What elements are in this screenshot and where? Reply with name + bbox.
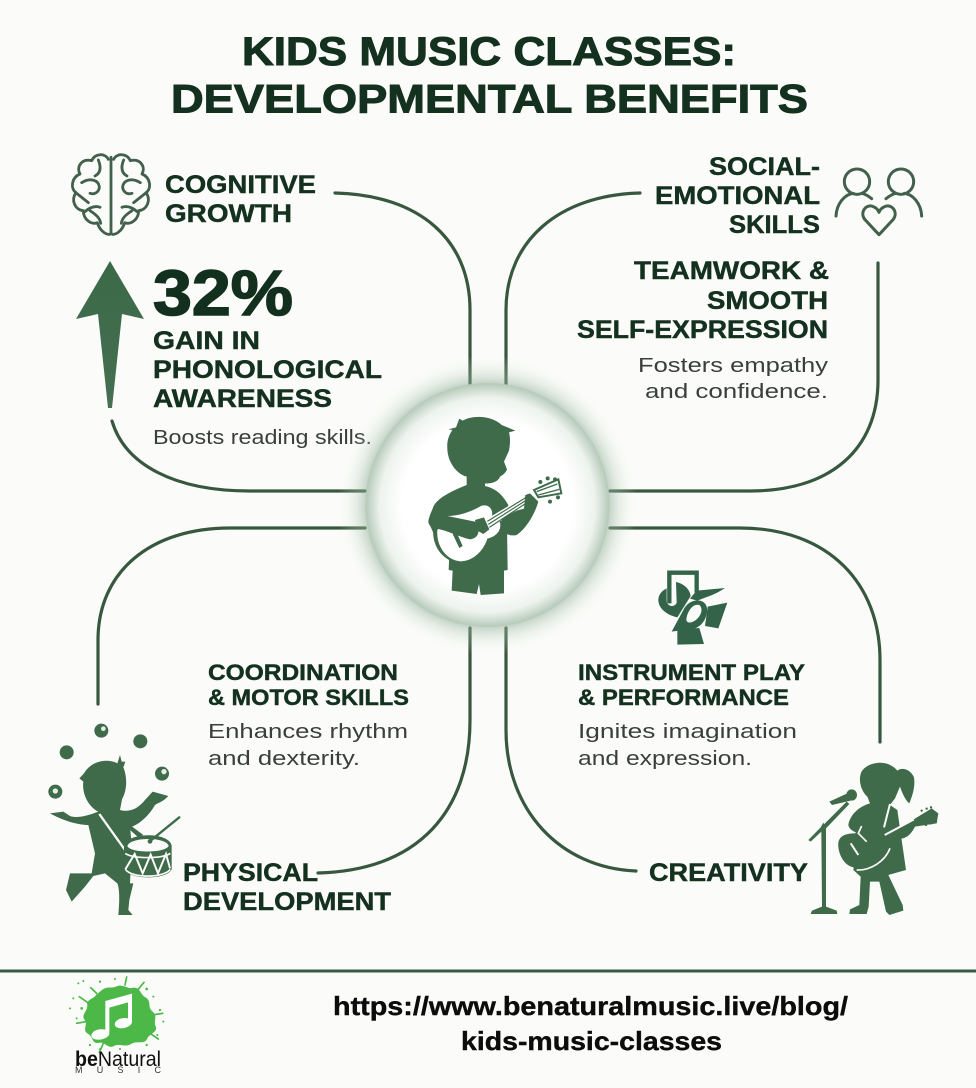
icon: two people and heart <box>836 169 922 235</box>
footer divider <box>0 970 976 972</box>
subheading: teamwork and self-expression: TEAMWORK & <box>634 257 829 285</box>
logo: beNatural Music: beNatural <box>75 1048 161 1071</box>
heading: social-emotional skills <box>655 153 820 239</box>
heading: physical development: PHYSICAL <box>183 859 318 887</box>
heading: physical development <box>183 859 391 916</box>
heading: physical development: DEVELOPMENT <box>183 888 391 916</box>
heading: social-emotional skills: SKILLS <box>729 211 820 239</box>
stat: 32% gain: 32% <box>153 257 293 329</box>
footer link: https://www.benaturalmusic.live/blog/ <box>333 991 848 1021</box>
text: enhances rhythm: Enhances rhythm <box>208 720 408 743</box>
logo: beNatural Music <box>69 977 164 1075</box>
heading: social-emotional skills: SOCIAL- <box>709 153 820 181</box>
stat: 32% gain: GAIN IN <box>153 327 260 355</box>
text: ignites imagination <box>578 720 797 770</box>
subheading: instrument play and performance <box>578 660 805 710</box>
icon: juggling child with drum <box>48 724 179 915</box>
subheading: instrument play and performance: INSTRUMENT PLAY <box>578 660 805 685</box>
footer link: kids-music-classes <box>461 1026 722 1056</box>
subheading: teamwork and self-expression: SMOOTH <box>707 287 828 315</box>
text: ignites imagination: Ignites imagination <box>578 720 797 743</box>
footer link <box>333 991 848 1056</box>
heading: cognitive growth: COGNITIVE <box>165 171 316 199</box>
text: enhances rhythm <box>208 720 408 770</box>
icon: girl singing with guitar <box>808 763 938 915</box>
connector curves <box>98 193 880 873</box>
text: boosts reading skills: Boosts reading skills. <box>153 426 372 449</box>
heading: cognitive growth <box>165 171 316 228</box>
heading: creativity: CREATIVITY <box>649 859 808 887</box>
title: KIDS MUSIC CLASSES: <box>242 30 736 74</box>
text: fosters empathy: and confidence. <box>645 380 828 403</box>
center badge: child with ukulele <box>338 355 638 655</box>
stat: 32% gain: PHONOLOGICAL <box>153 356 382 384</box>
icon: brain <box>72 155 150 234</box>
text: ignites imagination: and expression. <box>578 747 752 770</box>
subheading: teamwork and self-expression: SELF-EXPRESSION <box>577 316 828 344</box>
title: DEVELOPMENTAL BENEFITS <box>171 78 808 122</box>
subheading: coordination and motor skills: COORDINATION <box>208 660 398 685</box>
subheading: instrument play and performance: & PERFORMANCE <box>578 685 789 710</box>
logo: beNatural Music: MUSIC <box>75 1065 162 1075</box>
icon: spotlight <box>658 573 727 645</box>
heading: social-emotional skills: EMOTIONAL <box>655 182 820 210</box>
title <box>171 30 808 122</box>
text: fosters empathy: Fosters empathy <box>638 354 829 377</box>
subheading: teamwork and self-expression <box>577 257 829 344</box>
text: enhances rhythm: and dexterity. <box>208 747 360 770</box>
subheading: coordination and motor skills <box>208 660 409 710</box>
stat: 32% gain <box>153 257 382 413</box>
icon: up arrow <box>76 261 144 408</box>
heading: cognitive growth: GROWTH <box>165 200 292 228</box>
stat: 32% gain: AWARENESS <box>153 385 332 413</box>
subheading: coordination and motor skills: & MOTOR SKILLS <box>208 685 409 710</box>
text: fosters empathy <box>638 354 829 403</box>
